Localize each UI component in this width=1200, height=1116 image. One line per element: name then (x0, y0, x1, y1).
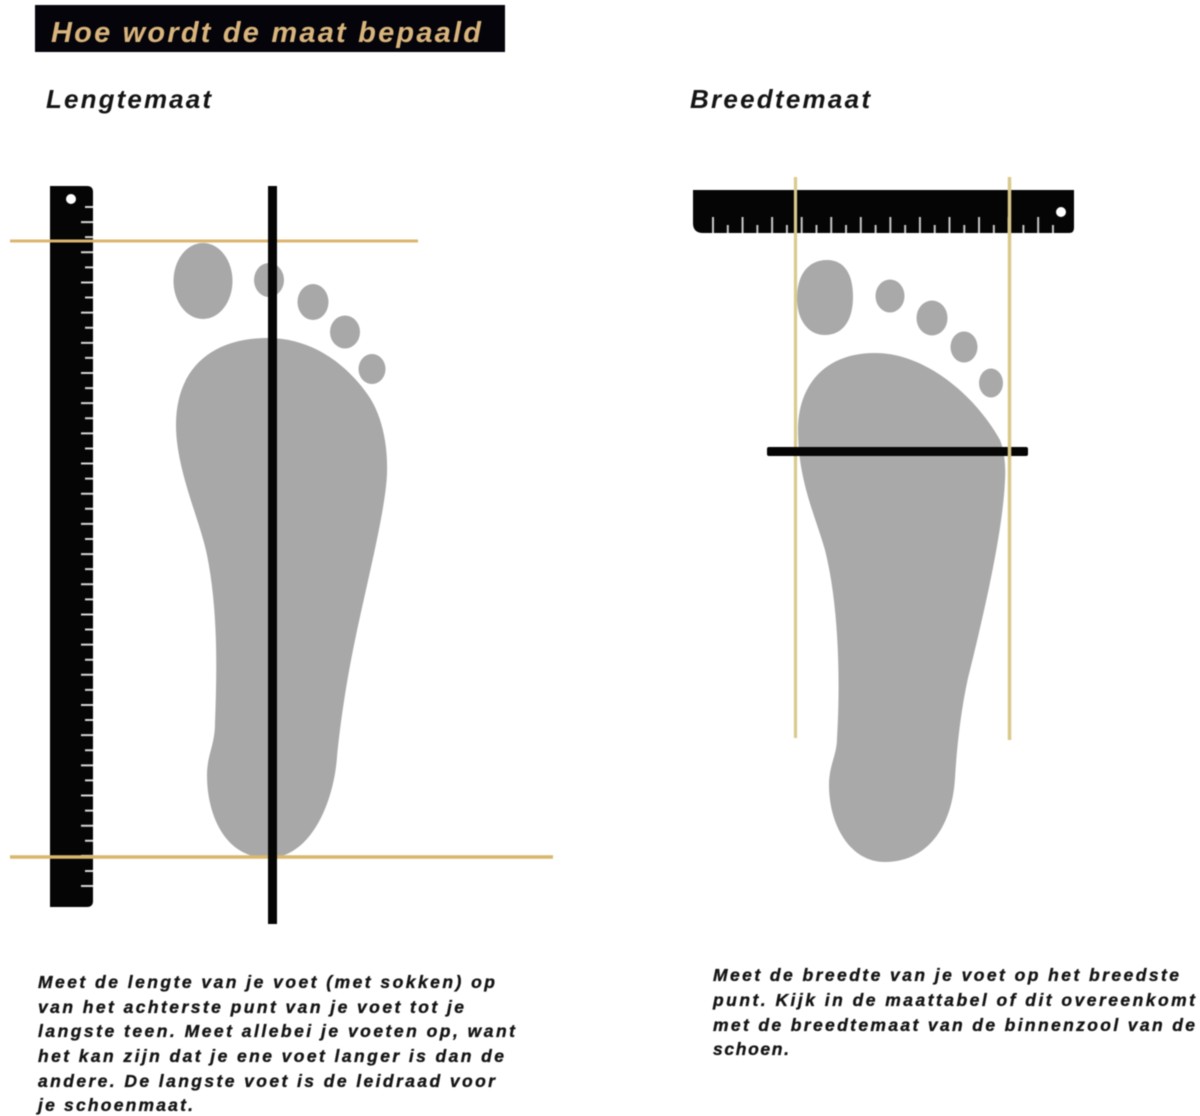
line: foot width axis (767, 447, 1028, 456)
icon: foot with toes, width view (797, 260, 1005, 862)
text block: length instructions: het kan zijn dat je ene voet langer is dan de (38, 1046, 504, 1066)
title banner: Hoe wordt de maat bepaald (51, 17, 482, 49)
heading: Breedtemaat: Breedtemaat (690, 84, 871, 114)
text block: length instructions: andere. De langste voet is de leidraad voor (38, 1071, 496, 1091)
icon: foot with toes, length view (174, 243, 387, 858)
line: top of longest toe (10, 240, 418, 242)
line: right foot edge (1008, 177, 1011, 740)
icon: vertical ruler (50, 186, 93, 907)
text block: length instructions: langste teen. Meet allebei je voeten op, want (38, 1021, 516, 1041)
text block: length instructions: van het achterste punt van je voet tot je (38, 997, 464, 1017)
text block: length instructions: Meet de lengte van je voet (met sokken) op (38, 972, 495, 992)
text block: width instructions: met de breedtemaat van de binnenzool van de (713, 1015, 1195, 1035)
text block: width instructions: Meet de breedte van je voet op het breedste (713, 965, 1179, 985)
title banner (35, 5, 505, 52)
text block: length instructions (36, 972, 516, 1115)
text block: length instructions: je schoenmaat. (36, 1095, 193, 1115)
line: foot length axis (268, 186, 277, 924)
text block: width instructions: punt. Kijk in de maattabel of dit overeenkomt (712, 990, 1196, 1010)
text block: width instructions (712, 965, 1196, 1059)
text block: width instructions: schoen. (713, 1039, 789, 1059)
line: left foot edge (794, 177, 797, 738)
line: back of heel (10, 855, 553, 859)
panel: width measurement diagram (693, 177, 1074, 862)
panel: length measurement diagram (10, 186, 553, 924)
heading: Lengtemaat: Lengtemaat (46, 84, 212, 114)
icon: horizontal ruler (693, 190, 1074, 233)
